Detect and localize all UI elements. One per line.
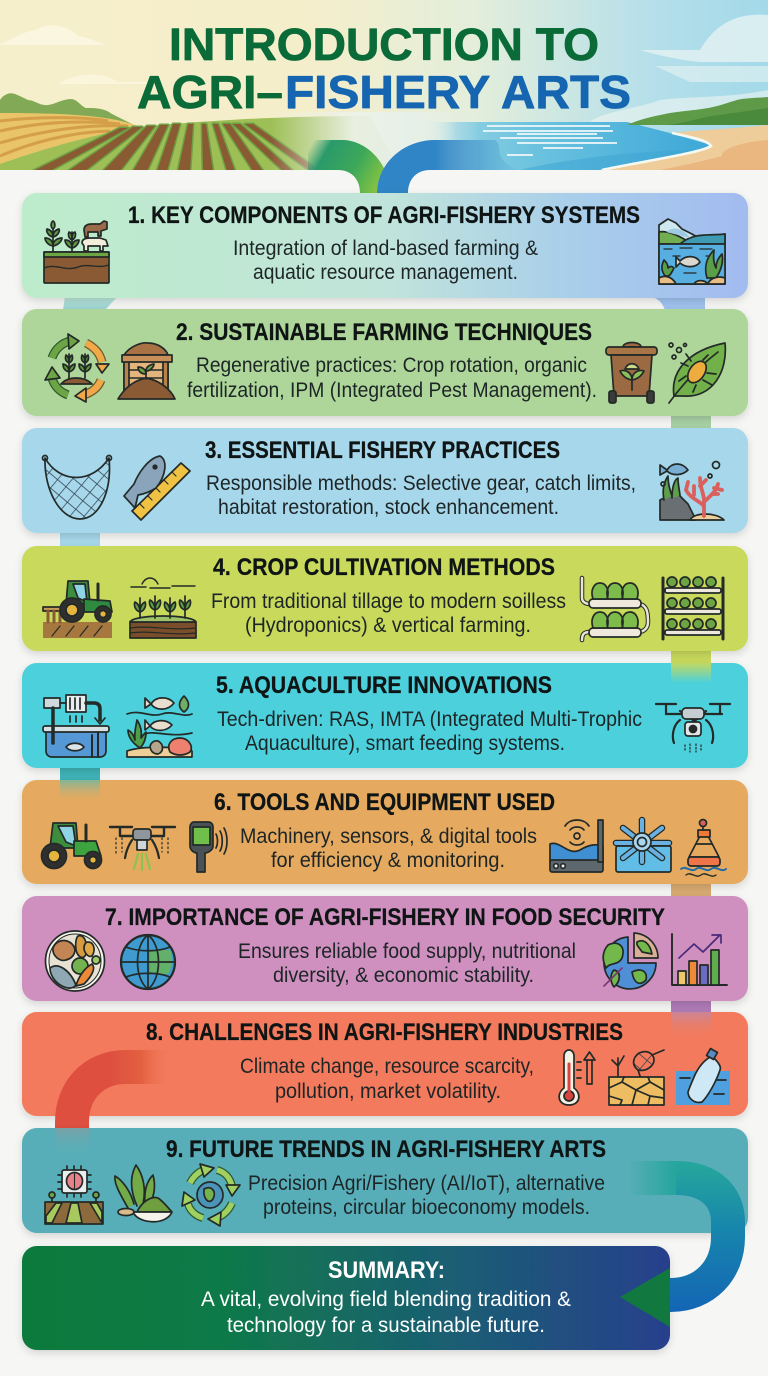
panel 6 background	[22, 780, 748, 884]
panel 6 body	[240, 824, 537, 872]
panel 5 background	[22, 663, 748, 768]
red arrow fade	[55, 1128, 89, 1156]
panel 2 body: fertilization, IPM (Integrated Pest Management).	[187, 378, 597, 402]
title: AGRI–	[137, 66, 283, 118]
connector: panel 7 to 8	[671, 999, 711, 1014]
icon: food plate	[46, 931, 104, 991]
icon: spraying drone	[110, 827, 175, 870]
panel 5 body: Tech-driven: RAS, IMTA (Integrated Multi-Trophic	[217, 707, 642, 731]
panel 2 heading: 2. SUSTAINABLE FARMING TECHNIQUES	[176, 319, 592, 346]
panel 7: food security	[22, 896, 748, 1001]
icon: tractor on tilled field	[43, 581, 112, 638]
panel 6 heading: 6. TOOLS AND EQUIPMENT USED	[214, 789, 555, 816]
connector: land stream	[308, 140, 385, 193]
icon: hydroponic pipes	[582, 578, 648, 640]
panel 3 body: Responsible methods: Selective gear, catch limits,	[206, 471, 636, 495]
icon: raised seedling bed	[130, 578, 196, 638]
icon: handheld sensor	[190, 822, 227, 872]
panel 8 background	[22, 1012, 748, 1116]
panel 9 body	[248, 1171, 605, 1219]
panel 9: future trends	[22, 1128, 748, 1233]
connector fade: panel 5 into 6	[60, 780, 100, 804]
panel 1 body	[233, 236, 538, 284]
panel 3 heading: 3. ESSENTIAL FISHERY PRACTICES	[205, 437, 560, 464]
connector fade: panel 7 into 8	[671, 1012, 711, 1040]
panel 7 body: Ensures reliable food supply, nutritional	[238, 939, 576, 963]
panel 9 background	[22, 1128, 748, 1233]
summary body: A vital, evolving field blending tradition &	[201, 1287, 571, 1311]
icon: circular bioeconomy	[182, 1164, 240, 1226]
panel 9 body: proteins, circular bioeconomy models.	[263, 1195, 590, 1219]
icon: recirculating aquaculture tank	[43, 695, 109, 757]
icon: coral reef habitat	[660, 462, 724, 520]
connector fade: panel 4 into 5	[671, 663, 711, 683]
icon: rising thermometer	[559, 1050, 595, 1105]
connector: panel 1 to 2 left	[63, 296, 118, 310]
panel 8: challenges	[22, 1012, 748, 1116]
icon: plastic bottle in water	[676, 1049, 730, 1105]
arrow head	[620, 1268, 670, 1327]
panel 7 body: diversity, & economic stability.	[273, 963, 534, 987]
panel 6: tools and equipment	[22, 780, 748, 884]
icon: vertical farm rack	[663, 577, 723, 639]
connector: panel 3 to 4	[60, 531, 100, 548]
panel 7 body	[238, 939, 576, 987]
title: INTRODUCTION TO	[169, 19, 599, 70]
connector: panel 1 to 2 right	[648, 296, 705, 310]
icon: growth bar chart	[672, 934, 727, 985]
summary heading: SUMMARY:	[328, 1257, 445, 1284]
panel 6 body: for efficiency & monitoring.	[271, 848, 505, 872]
panel 9 body: Precision Agri/Fishery (AI/IoT), alternative	[248, 1171, 605, 1195]
connector: water stream	[377, 140, 520, 193]
icon: compost bin	[606, 342, 657, 403]
connector: panel 2 to 3	[671, 414, 711, 430]
panel 5 heading: 5. AQUACULTURE INNOVATIONS	[216, 672, 552, 699]
arrow fade-in	[627, 1161, 677, 1195]
icon: seaweed and protein powder	[115, 1165, 172, 1222]
panel 4 body: From traditional tillage to modern soilless	[211, 589, 566, 613]
connector: red arrow from panel 8 to 9	[72, 1067, 172, 1128]
panel 8 body: Climate change, resource scarcity,	[240, 1054, 534, 1078]
panel 9 heading: 9. FUTURE TRENDS IN AGRI-FISHERY ARTS	[166, 1136, 606, 1163]
panel 3 body: habitat restoration, stock enhancement.	[218, 495, 559, 519]
panel 7 heading: 7. IMPORTANCE OF AGRI-FISHERY IN FOOD SECURITY	[105, 904, 665, 931]
panel 2 body	[187, 353, 597, 402]
connector: curved arrow from panel 9 to summary	[620, 1161, 728, 1327]
icon: water level monitor	[550, 820, 603, 872]
panel 1: key components	[22, 193, 748, 298]
panel 8 heading: 8. CHALLENGES IN AGRI-FISHERY INDUSTRIES	[146, 1019, 623, 1046]
panel 4 background	[22, 546, 748, 651]
summary body: technology for a sustainable future.	[227, 1313, 545, 1337]
connector: panel 4 to 5	[671, 649, 711, 665]
icon: tractor	[42, 823, 102, 868]
panel 2: sustainable farming	[22, 309, 748, 416]
connector: panel 5 to 6	[60, 766, 100, 782]
panel 1 body: aquatic resource management.	[253, 260, 518, 284]
panel 5 body: Aquaculture), smart feeding systems.	[245, 731, 565, 755]
panel 5 body	[217, 707, 642, 755]
panel 3 background	[22, 428, 748, 533]
icon: water landscape with fish	[659, 219, 725, 284]
summary background	[22, 1246, 670, 1350]
panel 4 body: (Hydroponics) & vertical farming.	[245, 613, 531, 637]
panel 8 body	[240, 1054, 534, 1103]
panel 5: aquaculture	[22, 663, 748, 768]
icon: aerator wheel	[616, 820, 671, 872]
panel 4 heading: 4. CROP CULTIVATION METHODS	[213, 554, 555, 581]
icon: marker buoy	[681, 820, 726, 876]
panel 4: crop cultivation	[22, 546, 748, 651]
panel 3: fishery practices	[22, 428, 748, 533]
panel 8 body: pollution, market volatility.	[275, 1079, 501, 1103]
panel 1 heading: 1. KEY COMPONENTS OF AGRI-FISHERY SYSTEMS	[128, 202, 640, 229]
panel 3 body	[206, 471, 636, 519]
icon: monitoring drone	[656, 704, 730, 752]
summary body	[201, 1287, 571, 1337]
panel 1 body: Integration of land-based farming &	[233, 236, 538, 260]
icon: leaf with beetle	[669, 343, 725, 403]
title: FISHERY ARTS	[285, 66, 631, 118]
summary panel	[22, 1246, 670, 1350]
panel 6 body: Machinery, sensors, & digital tools	[240, 824, 537, 848]
title	[137, 19, 631, 118]
icon: dry cracked soil and empty net	[609, 1050, 664, 1105]
panel 2 body: Regenerative practices: Crop rotation, organic	[196, 353, 587, 377]
icon: farm soil with plants and cows	[44, 221, 109, 283]
icon: integrated multi-trophic system	[127, 696, 192, 757]
icon: globe	[121, 935, 175, 989]
connector: panel 6 to 7	[671, 882, 711, 898]
icon: fish with measuring ruler	[124, 456, 190, 520]
icon: AI chip above field	[45, 1166, 103, 1224]
icon: fishing net	[42, 456, 112, 519]
icon: compost box	[118, 343, 175, 399]
panel 7 background	[22, 896, 748, 1001]
icon: earth with pie segment	[603, 933, 658, 989]
panel 4 body	[211, 589, 566, 637]
arrow band	[670, 1178, 728, 1295]
panel 1 background	[22, 193, 748, 298]
icon: crop rotation cycle	[45, 334, 109, 402]
panel 2 background	[22, 309, 748, 416]
header landscape	[0, 0, 768, 172]
